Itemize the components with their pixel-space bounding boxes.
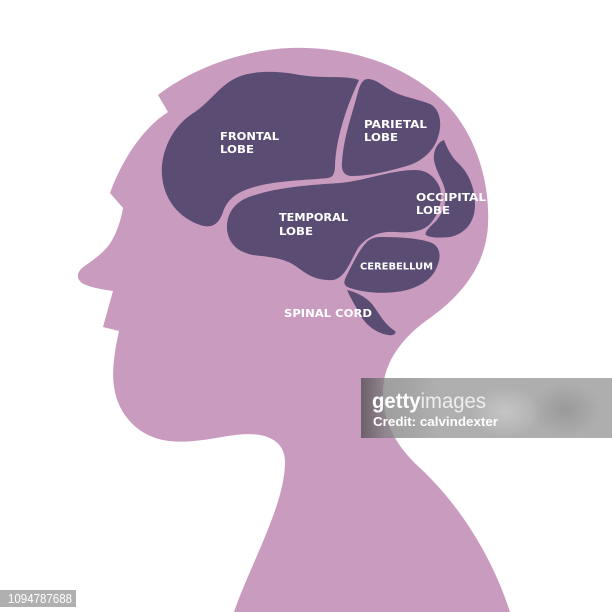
spinal cord shape [347, 290, 395, 335]
occipital lobe shape [426, 140, 475, 238]
head silhouette [78, 48, 510, 612]
label: occipital lobe: OCCIPITAL [416, 191, 486, 204]
watermark credit text: Credit: calvindexter [373, 414, 498, 429]
watermark banner [361, 378, 612, 438]
watermark logo text: gettyimages [372, 390, 486, 413]
label: frontal lobe: FRONTAL [220, 130, 279, 143]
label: spinal cord: SPINAL CORD [284, 307, 372, 320]
label: occipital lobe second line: LOBE [416, 204, 450, 217]
image id tag: 1094787688 [8, 592, 72, 606]
brain [162, 72, 475, 335]
label: frontal lobe second line: LOBE [220, 143, 254, 156]
label: parietal lobe second line: LOBE [364, 131, 398, 144]
cerebellum shape [344, 237, 440, 293]
label: cerebellum: CEREBELLUM [360, 262, 433, 272]
parietal lobe shape [342, 79, 440, 176]
frontal lobe shape [162, 72, 359, 226]
label: parietal lobe: PARIETAL [364, 118, 427, 131]
label: temporal lobe second line: LOBE [279, 225, 313, 238]
label: temporal lobe: TEMPORAL [279, 211, 348, 224]
temporal lobe shape [227, 170, 441, 280]
